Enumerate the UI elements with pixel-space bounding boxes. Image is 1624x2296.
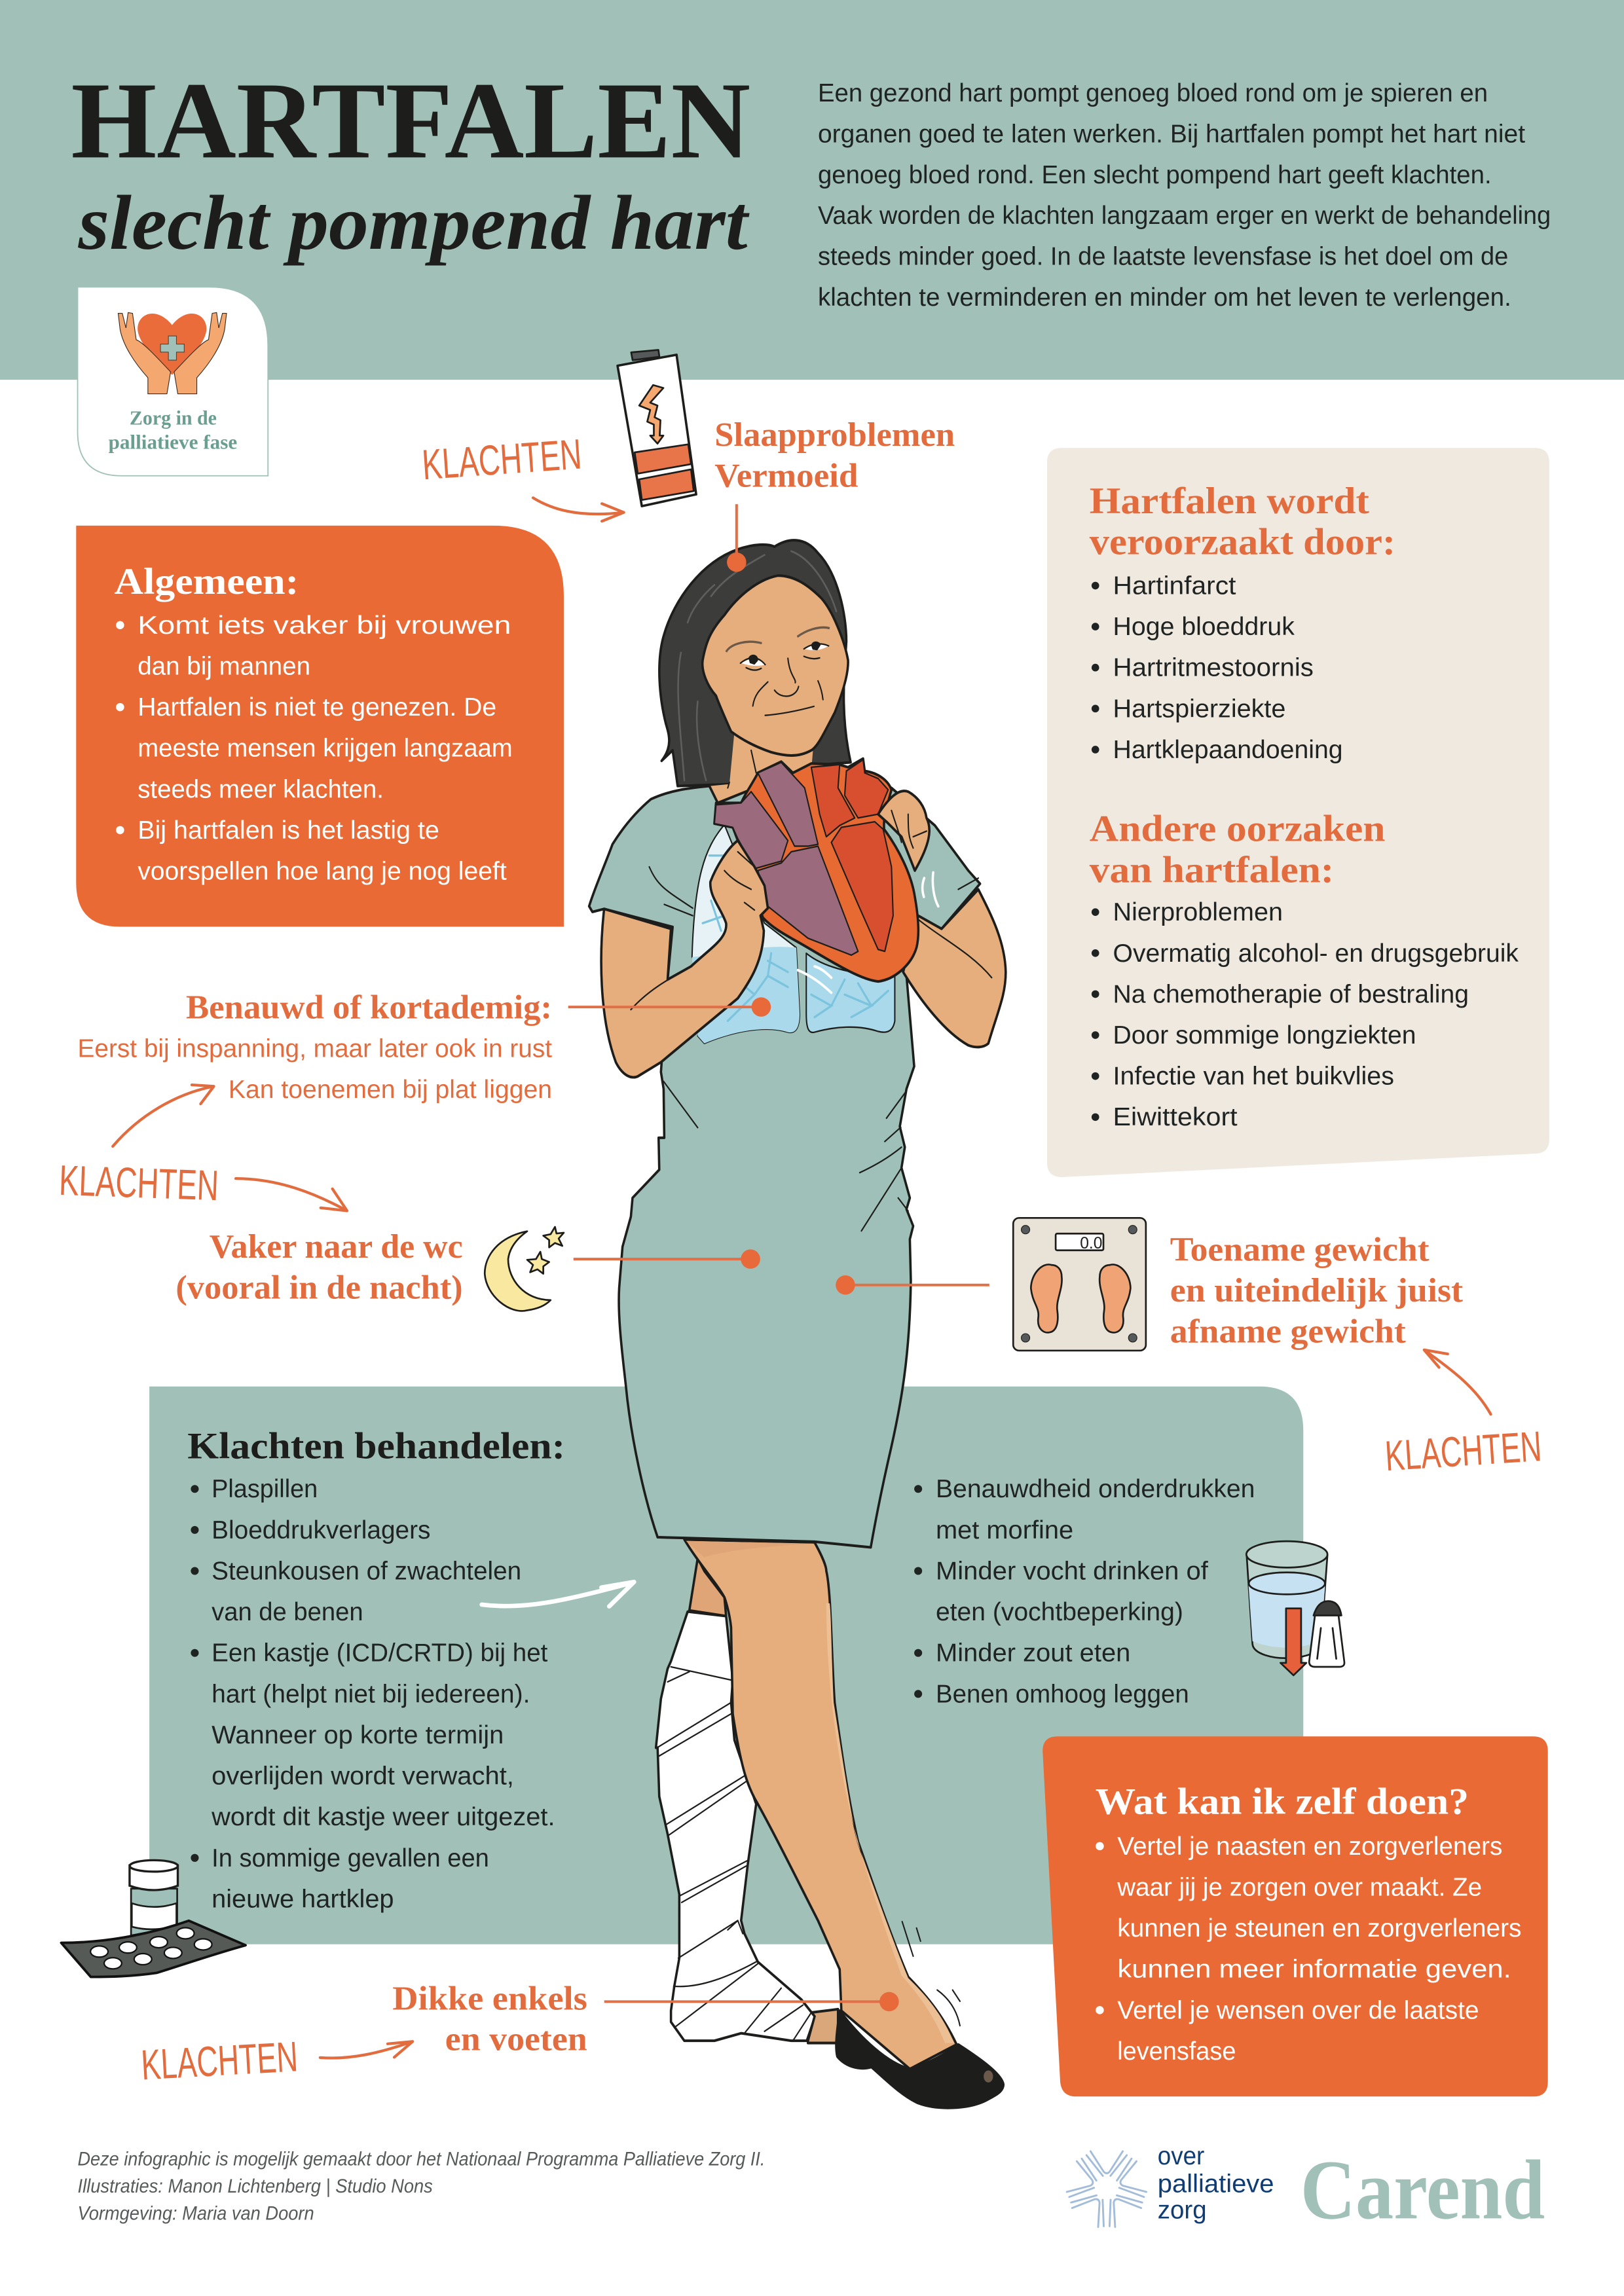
logo: over palliatieve zorg: zorg	[1158, 2196, 1207, 2224]
list: andere oorzaken: Door sommige longziekten	[1113, 1021, 1416, 1049]
heading: veroorzaakt door: veroorzaakt door:	[1090, 521, 1395, 562]
callout: toename gewicht: en uiteindelijk juist	[1170, 1272, 1463, 1309]
right hand	[878, 791, 929, 871]
intro text: Vaak worden de klachten langzaam erger en werkt de behandeling	[818, 201, 1551, 230]
list: oorzaken: Hartklepaandoening	[1113, 735, 1343, 764]
list: behandelen rechts: Benen omhoog leggen	[936, 1679, 1189, 1708]
callout: vaker naar de wc: Vaker naar de wc	[210, 1228, 463, 1266]
logo: over palliatieve zorg: over	[1158, 2142, 1204, 2170]
intro text: genoeg bloed rond. Een slecht pompend hart geeft klachten.	[818, 160, 1492, 189]
callout: benauwd: Kan toenemen bij plat liggen	[229, 1075, 552, 1104]
list: behandelen links: Wanneer op korte termijn	[212, 1721, 504, 1749]
icon: star mark	[1064, 2151, 1149, 2232]
list: behandelen links: van de benen	[212, 1597, 363, 1626]
list: behandelen links: Bloeddrukverlagers	[212, 1516, 430, 1544]
heading: wat kan ik zelf doen: Wat kan ik zelf doen?	[1096, 1781, 1469, 1823]
list: andere oorzaken: Infectie van het buikvlies	[1113, 1062, 1394, 1091]
intro text: klachten te verminderen en minder om het leven te verlengen.	[818, 283, 1511, 312]
callout: vaker naar de wc	[175, 1228, 760, 1307]
heading: veroorzaakt door	[1090, 481, 1395, 562]
callout: benauwd: Benauwd of kortademig:	[186, 989, 552, 1026]
bullet list: algemeen	[116, 611, 513, 886]
heading: klachten behandelen: Klachten behandelen:	[187, 1425, 565, 1467]
logo: over palliatieve zorg: palliatieve	[1158, 2170, 1274, 2198]
bullet list: algemeen: dan bij mannen	[138, 651, 310, 680]
title	[71, 60, 750, 266]
eyes	[741, 642, 828, 670]
heading: andere oorzaken	[1090, 809, 1385, 890]
logo: over palliatieve zorg	[1064, 2142, 1274, 2232]
list: behandelen rechts: Minder zout eten	[936, 1639, 1130, 1667]
icon: glass and salt	[1246, 1541, 1344, 1675]
heading: algemeen: Algemeen:	[114, 561, 299, 602]
nose and mouth	[753, 658, 823, 716]
bullet list: algemeen: Komt iets vaker bij vrouwen	[138, 611, 511, 640]
intro text: Een gezond hart pompt genoeg bloed rond om je spieren en	[818, 79, 1488, 107]
list: oorzaken	[1092, 571, 1343, 764]
intro text: organen goed te laten werken. Bij hartfalen pompt het hart niet	[818, 119, 1525, 148]
label and arrow: klachten rechts	[1384, 1350, 1543, 1480]
bullet list: algemeen: steeds meer klachten.	[138, 774, 384, 803]
title: HARTFALEN	[71, 60, 750, 181]
logo caption	[108, 407, 237, 453]
list: behandelen links: Steunkousen of zwachtelen	[212, 1556, 521, 1585]
panel: oorzaken	[1047, 448, 1549, 1177]
footer credits: Deze infographic is mogelijk gemaakt door het Nationaal Programma Palliatieve Zorg II.	[78, 2148, 765, 2170]
list: behandelen links: hart (helpt niet bij iedereen).	[212, 1679, 530, 1708]
label and arrow: klachten rechts: KLACHTEN	[1384, 1422, 1543, 1480]
header band	[0, 0, 1624, 380]
panel: wat kan ik zelf doen	[1043, 1736, 1548, 2096]
motion lines	[902, 1922, 960, 2026]
list: andere oorzaken: Nierproblemen	[1113, 898, 1283, 926]
list: zelf doen: Vertel je wensen over de laatste	[1117, 1995, 1479, 2024]
callout: slaapproblemen	[714, 416, 955, 572]
label and arrow: klachten boven: KLACHTEN	[420, 430, 583, 488]
list: andere oorzaken	[1092, 898, 1519, 1131]
callout: toename gewicht	[836, 1231, 1463, 1351]
list: behandelen rechts	[914, 1474, 1255, 1708]
callout: slaapproblemen: Slaapproblemen	[714, 416, 955, 454]
list: behandelen links: overlijden wordt verwacht,	[212, 1762, 514, 1791]
label and arrow: klachten boven	[420, 430, 624, 521]
callout: dikke enkels: en voeten	[445, 2020, 587, 2058]
list: zelf doen	[1096, 1832, 1521, 2066]
panel: algemeen	[76, 526, 564, 927]
back leg skin	[690, 1558, 726, 1616]
list: behandelen links: Een kastje (ICD/CRTD) bij het	[212, 1639, 547, 1667]
callout: benauwd	[78, 989, 771, 1104]
list: oorzaken: Hartinfarct	[1113, 571, 1236, 600]
icon: weighing scale	[1013, 1218, 1146, 1351]
face	[703, 575, 848, 756]
callout: slaapproblemen: Vermoeid	[714, 458, 858, 495]
list: oorzaken: Hoge bloeddruk	[1113, 612, 1295, 641]
left arm and hand	[601, 841, 768, 1078]
hair	[659, 540, 851, 786]
heading: veroorzaakt door: Hartfalen wordt	[1090, 481, 1369, 522]
callout: dikke enkels: Dikke enkels	[392, 1980, 587, 2017]
title: slecht pompend hart	[78, 179, 750, 266]
bandaged leg	[656, 1612, 838, 2043]
list: andere oorzaken: Na chemotherapie of bestraling	[1113, 979, 1469, 1008]
icon: weighing scale: 0.0	[1080, 1235, 1102, 1252]
list: andere oorzaken: Eiwittekort	[1113, 1102, 1238, 1131]
list: behandelen rechts: Benauwdheid onderdrukken	[936, 1474, 1255, 1503]
logo card: zorg in de palliatieve fase	[78, 287, 268, 476]
illustration: woman holding heart	[589, 540, 1006, 2108]
front leg	[684, 1539, 957, 2069]
list: andere oorzaken: Overmatig alcohol- en drugsgebruik	[1113, 939, 1519, 968]
callout: benauwd: Eerst bij inspanning, maar later ook in rust	[78, 1034, 552, 1063]
label and arrow: klachten onder: KLACHTEN	[140, 2032, 299, 2089]
label and arrows: klachten links	[58, 1085, 347, 1211]
list: zelf doen: kunnen meer informatie geven.	[1117, 1955, 1511, 1984]
bullet list: algemeen: Bij hartfalen is het lastig te	[138, 816, 439, 845]
intro text: steeds minder goed. In de laatste levensfase is het doel om de	[818, 242, 1508, 271]
list: behandelen links: In sommige gevallen een	[212, 1844, 489, 1872]
heading: andere oorzaken: Andere oorzaken	[1090, 809, 1385, 850]
arrow: steunkousen	[482, 1582, 634, 1607]
icon: pills and bottle	[61, 1860, 246, 1977]
list: oorzaken: Hartritmestoornis	[1113, 653, 1314, 682]
bullet list: algemeen: meeste mensen krijgen langzaam	[138, 734, 513, 763]
list: oorzaken: Hartspierziekte	[1113, 694, 1285, 723]
callout: vaker naar de wc: (vooral in de nacht)	[175, 1269, 463, 1307]
list: behandelen links	[191, 1474, 555, 1913]
lungs	[692, 825, 938, 1044]
panel: treatment background	[149, 1387, 1303, 1944]
list: zelf doen: waar jij je zorgen over maakt. Ze	[1116, 1872, 1482, 1901]
list: behandelen rechts: eten (vochtbeperking)	[936, 1597, 1183, 1626]
list: zelf doen: levensfase	[1117, 2037, 1236, 2066]
bullet list: algemeen: Hartfalen is niet te genezen. De	[138, 693, 496, 721]
logo caption: Zorg in de	[130, 407, 217, 429]
icon: moon and stars	[485, 1227, 564, 1311]
callout: dikke enkels	[392, 1980, 899, 2058]
dress folds	[649, 867, 978, 1231]
list: zelf doen: kunnen je steunen en zorgverleners	[1117, 1914, 1521, 1942]
footer credits	[78, 2148, 765, 2225]
heading: andere oorzaken: van hartfalen:	[1090, 849, 1334, 890]
treatment text	[187, 1425, 1255, 1913]
icon: heart in hands	[118, 312, 227, 394]
list: behandelen rechts: met morfine	[936, 1516, 1073, 1544]
eyebrows	[726, 627, 830, 652]
bullet list: algemeen: voorspellen hoe lang je nog leeft	[138, 857, 507, 886]
list: zelf doen: Vertel je naasten en zorgverleners	[1117, 1832, 1502, 1861]
logo: carend: Carend	[1301, 2143, 1545, 2237]
list: behandelen links: Plaspillen	[212, 1474, 318, 1503]
logo caption: palliatieve fase	[108, 431, 237, 453]
shoe	[836, 2011, 1003, 2108]
icon: battery	[618, 350, 696, 506]
right arm	[903, 889, 1006, 1047]
callout: toename gewicht: Toename gewicht	[1170, 1231, 1430, 1268]
footer credits: Vormgeving: Maria van Doorn	[78, 2203, 314, 2225]
footer credits: Illustraties: Manon Lichtenberg | Studio Nons	[78, 2176, 433, 2197]
label and arrows: klachten links: KLACHTEN	[58, 1156, 219, 1209]
intro text	[818, 79, 1551, 312]
list: behandelen rechts: Minder vocht drinken of	[936, 1556, 1208, 1585]
callout: toename gewicht: afname gewicht	[1170, 1313, 1406, 1351]
list: behandelen links: nieuwe hartklep	[212, 1884, 394, 1913]
anatomical heart	[714, 759, 918, 981]
dress	[589, 765, 980, 1547]
list: behandelen links: wordt dit kastje weer uitgezet.	[211, 1802, 555, 1831]
neck	[709, 731, 813, 803]
